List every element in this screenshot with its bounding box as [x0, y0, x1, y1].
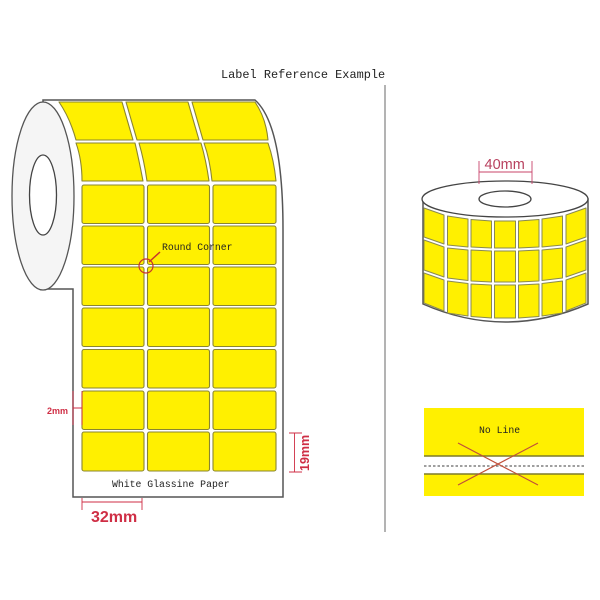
curved top labels: [59, 102, 276, 181]
dimension: 2mm gap: 2mm: [47, 406, 68, 416]
small label roll: [422, 181, 588, 322]
roll backing paper: [43, 100, 283, 497]
callout circle: [139, 259, 153, 273]
yellow label strip: [424, 408, 584, 496]
gap edges: [424, 456, 584, 474]
dimension: 40mm core: 40mm: [484, 157, 525, 173]
roll side face: [12, 102, 74, 290]
white gap: [424, 456, 584, 474]
small roll body: [423, 199, 588, 322]
no line example: [424, 408, 584, 496]
roll core hole: [30, 155, 56, 235]
dashed line: [424, 465, 584, 467]
flat label grid: [82, 185, 276, 471]
divider: [384, 85, 386, 532]
small roll labels: [424, 208, 586, 318]
paper caption: White Glassine Paper: [112, 479, 230, 490]
no line text: No Line: [479, 425, 520, 436]
red cross: [458, 443, 538, 485]
callout pointer: [149, 252, 160, 262]
dimension: 40mm core: [479, 157, 532, 184]
small roll core hole: [479, 191, 531, 207]
dimension: 32mm width: 32mm: [91, 509, 137, 526]
small roll top face: [422, 181, 588, 217]
dimension: 2mm gap: [47, 391, 82, 425]
title: Label Reference Example: [221, 68, 385, 82]
dimension: 19mm height: 19mm: [298, 435, 312, 471]
large label roll: [12, 100, 283, 497]
dimension: 32mm width: [82, 498, 142, 526]
callout text: Round Corner: [162, 242, 233, 253]
dimension: 19mm height: [289, 433, 312, 472]
round corner callout: [139, 242, 233, 273]
